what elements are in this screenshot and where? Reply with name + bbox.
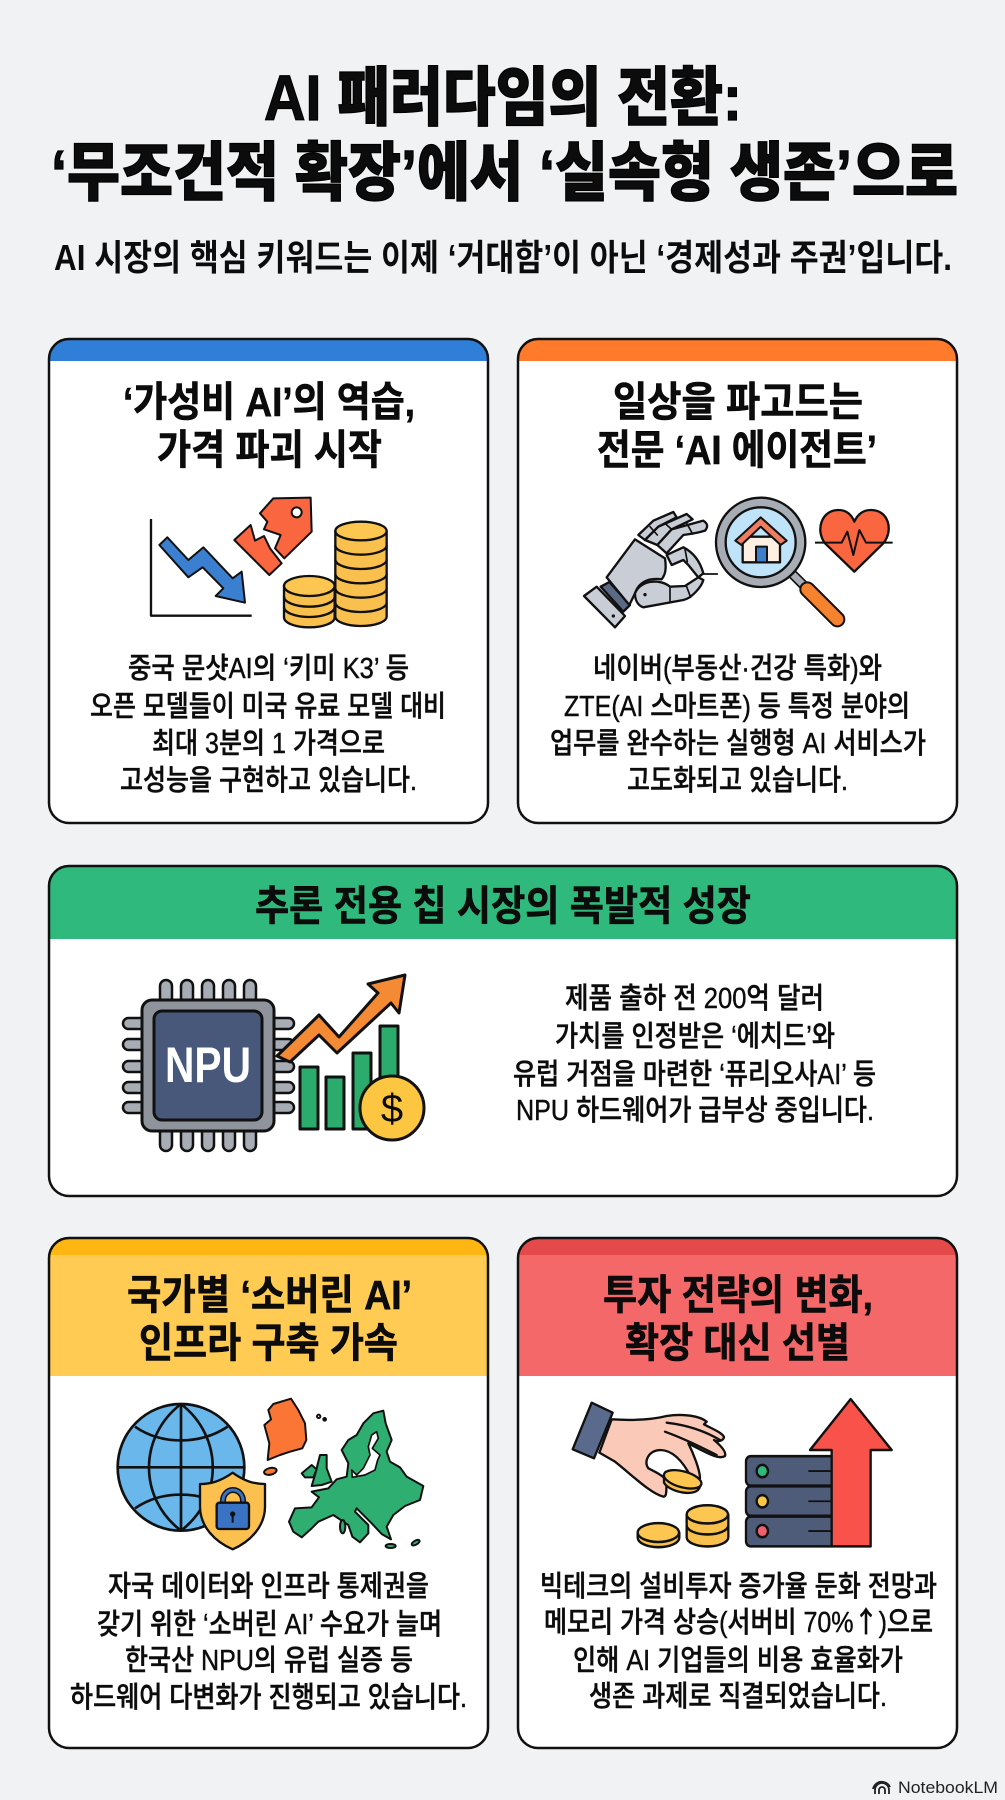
chart: rising bars with arrow and dollar coin (277, 975, 424, 1140)
body text: investment strategy: 메모리 가격 상승(서버비 70%↑)으로 (544, 1599, 933, 1641)
body text: NPU chips: 가치를 인정받은 ‘에치드’와 (555, 1020, 835, 1053)
title (51, 62, 958, 209)
body text: AI agents: ZTE(AI 스마트폰) 등 특정 분야의 (564, 690, 910, 723)
body text: AI agents (550, 652, 926, 797)
body text: AI agents: 고도화되고 있습니다. (627, 764, 848, 797)
body text: NPU chips (513, 982, 876, 1127)
logo: NotebookLM: NotebookLM (898, 1778, 998, 1797)
icon: server stack with red up arrow (746, 1399, 892, 1546)
heading: investment strategy: 투자 전략의 변화, (603, 1272, 873, 1318)
body text: sovereign AI: 하드웨어 다변화가 진행되고 있습니다. (70, 1681, 467, 1714)
heading: value AI: ‘가성비 AI’의 역습, (123, 379, 415, 425)
body text: NPU chips: 유럽 거점을 마련한 ‘퓨리오사AI’ 등 (513, 1058, 876, 1091)
body text: value AI: 중국 문샷AI의 ‘키미 K3’ 등 (128, 652, 409, 685)
icon: map of Korea and Europe (263, 1399, 423, 1548)
panel: sovereign AI (49, 1238, 488, 1748)
icon: falling chart, broken price tag and coins (151, 498, 387, 627)
heading: AI agents: 일상을 파고드는 (613, 379, 863, 425)
icon: NPU chip (123, 980, 294, 1151)
icon: globe with shield and lock (118, 1404, 265, 1549)
body text: value AI: 최대 3분의 1 가격으로 (152, 727, 385, 760)
body text: sovereign AI: 한국산 NPU의 유럽 실증 등 (125, 1644, 413, 1677)
body text: AI agents: 업무를 완수하는 실행형 AI 서비스가 (550, 727, 926, 760)
body text: sovereign AI (70, 1570, 467, 1714)
body text: sovereign AI: 자국 데이터와 인프라 통제권을 (108, 1570, 429, 1603)
icon: magnifier with house (716, 498, 837, 619)
heading: sovereign AI: 국가별 ‘소버린 AI’ (127, 1272, 412, 1318)
body text: investment strategy (540, 1570, 937, 1713)
body text: AI agents: 네이버(부동산·건강 특화)와 (593, 652, 882, 685)
heading: AI agents (597, 379, 877, 473)
heading: sovereign AI: 인프라 구축 가속 (139, 1320, 398, 1366)
body text: NPU chips: 제품 출하 전 200억 달러 (565, 982, 824, 1015)
heading: AI agents: 전문 ‘AI 에이전트’ (597, 427, 877, 473)
heading: investment strategy (603, 1272, 873, 1366)
icon: NPU chip: NPU (165, 1037, 251, 1093)
icon: robot hand (584, 512, 717, 627)
body text: sovereign AI: 갖기 위한 ‘소버린 AI’ 수요가 늘며 (97, 1608, 442, 1641)
panel: investment strategy (518, 1238, 957, 1748)
heading: value AI (123, 379, 415, 473)
panel: AI agents (518, 339, 957, 823)
heading: NPU chips: 추론 전용 칩 시장의 폭발적 성장 (255, 883, 751, 929)
title: AI 패러다임의 전환: (264, 62, 742, 134)
body text: value AI (90, 652, 446, 797)
body text: investment strategy: 인해 AI 기업들의 비용 효율화가 (573, 1644, 903, 1677)
body text: value AI: 고성능을 구현하고 있습니다. (120, 764, 417, 797)
chart: rising bars with arrow and dollar coin: $ (381, 1087, 403, 1131)
body text: investment strategy: 생존 과제로 직결되었습니다. (589, 1680, 887, 1713)
heading: investment strategy: 확장 대신 선별 (625, 1320, 850, 1366)
panel: NPU chips (49, 866, 957, 1196)
icon: hand picking coins (573, 1403, 728, 1547)
body text: value AI: 오픈 모델들이 미국 유료 모델 대비 (90, 690, 446, 723)
panel: value AI (49, 339, 488, 823)
body text: NPU chips: NPU 하드웨어가 급부상 중입니다. (516, 1094, 874, 1127)
heading: sovereign AI (127, 1272, 412, 1366)
icon: heart with pulse (815, 510, 893, 572)
heading: value AI: 가격 파괴 시작 (157, 427, 382, 473)
body text: investment strategy: 빅테크의 설비투자 증가율 둔화 전망과 (540, 1570, 937, 1603)
